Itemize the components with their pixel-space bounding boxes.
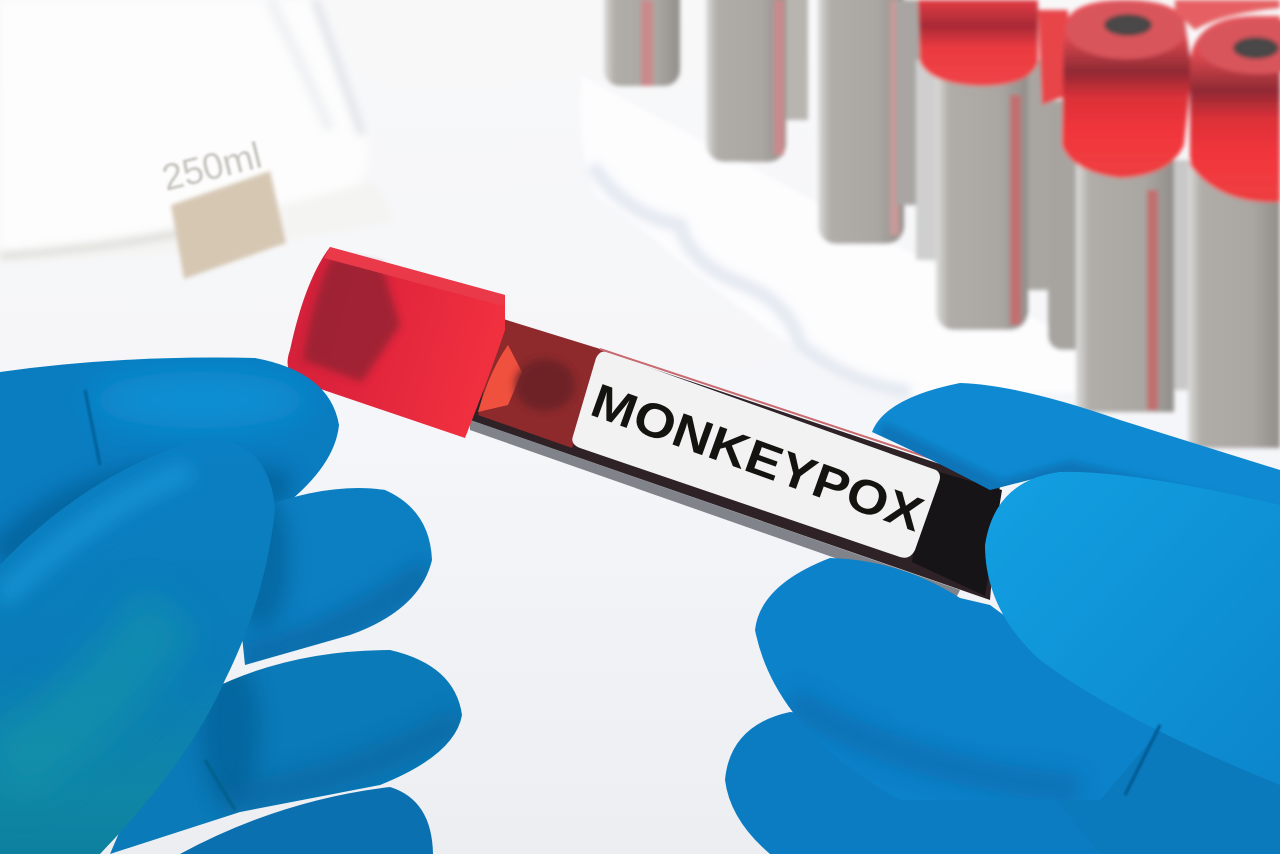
index finger xyxy=(0,358,339,565)
monkeypox label: MONKEYPOX xyxy=(584,374,930,542)
blood sample xyxy=(478,318,610,448)
rear grey tubes xyxy=(604,0,680,86)
left glove xyxy=(0,340,470,854)
thumb xyxy=(985,472,1280,785)
tube: rear middle xyxy=(936,40,1028,330)
middle finger xyxy=(755,558,1156,800)
little finger xyxy=(180,787,433,854)
tube: front middle xyxy=(1076,130,1174,412)
dark end of tube xyxy=(912,468,1002,596)
tube: front right xyxy=(1188,160,1280,448)
beaker label xyxy=(171,171,286,279)
red cap xyxy=(288,247,505,438)
glass edge xyxy=(470,420,960,600)
index finger xyxy=(872,383,1280,505)
beaker volume mark: 250ml xyxy=(158,135,266,199)
beaker xyxy=(0,0,396,279)
tube body xyxy=(470,318,1000,600)
ring finger xyxy=(100,640,470,854)
central blood test tube xyxy=(288,247,1002,600)
thumb xyxy=(0,430,290,854)
monkeypox label xyxy=(572,352,940,558)
test tube rack xyxy=(580,0,1280,448)
right glove xyxy=(725,375,1280,854)
middle finger xyxy=(242,488,432,665)
lower finger xyxy=(725,712,1180,854)
